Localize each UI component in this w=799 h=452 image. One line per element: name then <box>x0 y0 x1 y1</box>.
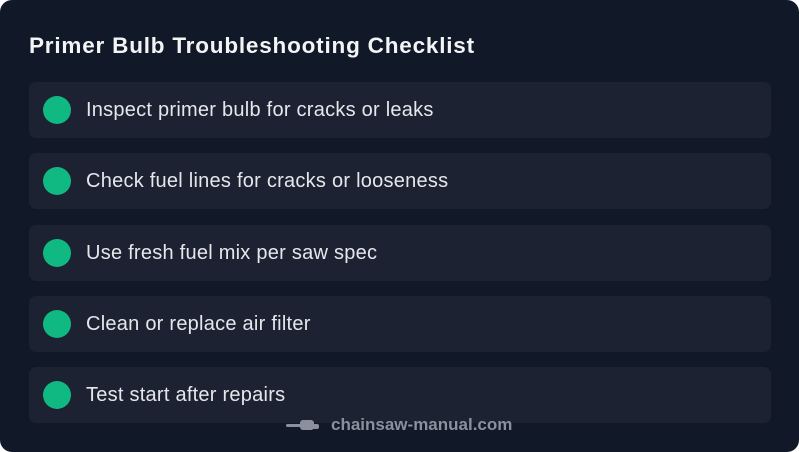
item 2 <box>29 153 771 209</box>
item 2: Check fuel lines for cracks or looseness <box>86 170 448 192</box>
item 4 <box>29 296 771 352</box>
icon: chainsaw <box>286 420 319 430</box>
item 3: Use fresh fuel mix per saw spec <box>86 242 377 264</box>
watermark: chainsaw-manual.com <box>331 415 512 434</box>
item 5: Test start after repairs <box>86 384 285 406</box>
item 1 <box>29 82 771 138</box>
item 4: Clean or replace air filter <box>86 313 311 335</box>
item 3 <box>29 225 771 281</box>
title: Primer Bulb Troubleshooting Checklist <box>29 33 475 58</box>
item 5 <box>29 367 771 423</box>
item 1: Inspect primer bulb for cracks or leaks <box>86 99 434 121</box>
